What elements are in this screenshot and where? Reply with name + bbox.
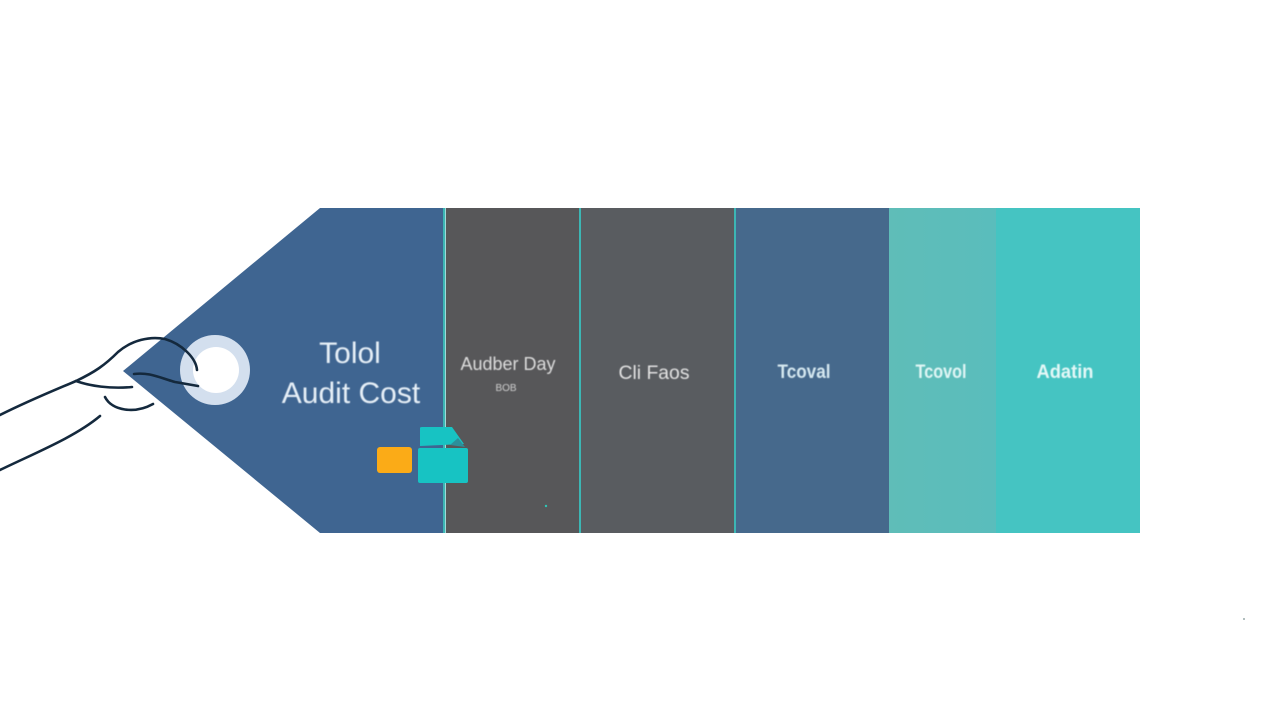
- label: admin: Adatin: [1036, 362, 1094, 383]
- panel: travel light: [889, 208, 996, 533]
- icon: small teal dot: [545, 505, 547, 507]
- panel: total audit cost tag head: [123, 208, 444, 533]
- icon: teal folder: [418, 427, 468, 483]
- heading: total audit cost: Audit Cost: [282, 377, 421, 410]
- label: cli fees: Cli Faos: [618, 363, 690, 384]
- panel: admin: [996, 208, 1140, 533]
- label: travel light: Tcovol: [916, 362, 966, 383]
- icon: orange folder: [377, 447, 412, 473]
- heading: total audit cost: [282, 337, 421, 410]
- decorative speck: [1243, 618, 1245, 620]
- panel: auditor day: [446, 208, 579, 533]
- label: auditor day sub-value: BOB: [495, 383, 517, 394]
- icon: hand line art: [0, 338, 198, 470]
- panel: cli fees: [581, 208, 734, 533]
- label: travel: Tcoval: [778, 362, 830, 383]
- icon: tag hole: [180, 335, 250, 405]
- panel: travel dark: [736, 208, 889, 533]
- heading: total audit cost: Tolol: [319, 337, 381, 370]
- label: auditor day: Audber Day: [460, 354, 556, 374]
